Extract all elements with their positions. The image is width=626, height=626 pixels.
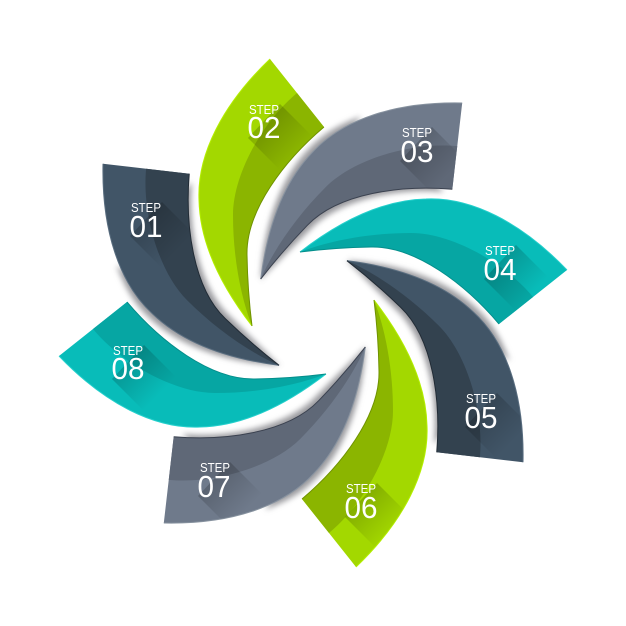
petal 01 — [53, 126, 330, 403]
step label 04: STEP — [485, 243, 515, 258]
label shadow 04 — [484, 245, 540, 302]
number 05: 05 — [464, 400, 498, 435]
label shadow 03 — [400, 127, 452, 180]
label shadow 02 — [248, 104, 304, 161]
panel: step 01 — [102, 164, 280, 366]
step label 08: STEP — [113, 343, 143, 358]
step label 05: STEP — [466, 391, 496, 406]
petal 04 — [300, 199, 567, 324]
step label 02: STEP — [249, 102, 279, 117]
petal 05 — [296, 223, 573, 500]
panel: step 08 — [59, 302, 326, 427]
step label 03: STEP — [402, 125, 432, 140]
petal 08 — [59, 302, 326, 427]
panel: step 04 — [300, 199, 567, 324]
number 06: 06 — [344, 490, 378, 525]
step label 07: STEP — [200, 460, 230, 475]
number 08: 08 — [112, 351, 144, 386]
label shadow 06 — [345, 483, 402, 542]
panel: step 02 — [199, 59, 325, 326]
petal 07 — [126, 296, 403, 573]
petal 06 — [302, 300, 427, 567]
label shadow 08 — [112, 345, 168, 402]
panel: step 06 — [302, 300, 427, 567]
label shadow 07 — [198, 462, 252, 517]
label shadow 05 — [466, 393, 515, 444]
number 07: 07 — [198, 469, 230, 504]
crescent shadows in the gaps — [106, 106, 520, 520]
petal 02 — [199, 59, 324, 326]
step label 06: STEP — [346, 481, 376, 496]
number 04: 04 — [484, 252, 516, 287]
infographic: eight step spiral — [58, 58, 568, 568]
number 01: 01 — [130, 209, 162, 244]
number 02: 02 — [248, 110, 280, 145]
panel: step 05 — [346, 260, 524, 462]
panel: step 07 — [164, 346, 366, 524]
label shadow 01 — [130, 202, 176, 254]
petal 03 — [223, 53, 500, 330]
number 03: 03 — [400, 134, 434, 169]
panel: step 03 — [260, 102, 462, 280]
step label 01: STEP — [131, 200, 161, 215]
